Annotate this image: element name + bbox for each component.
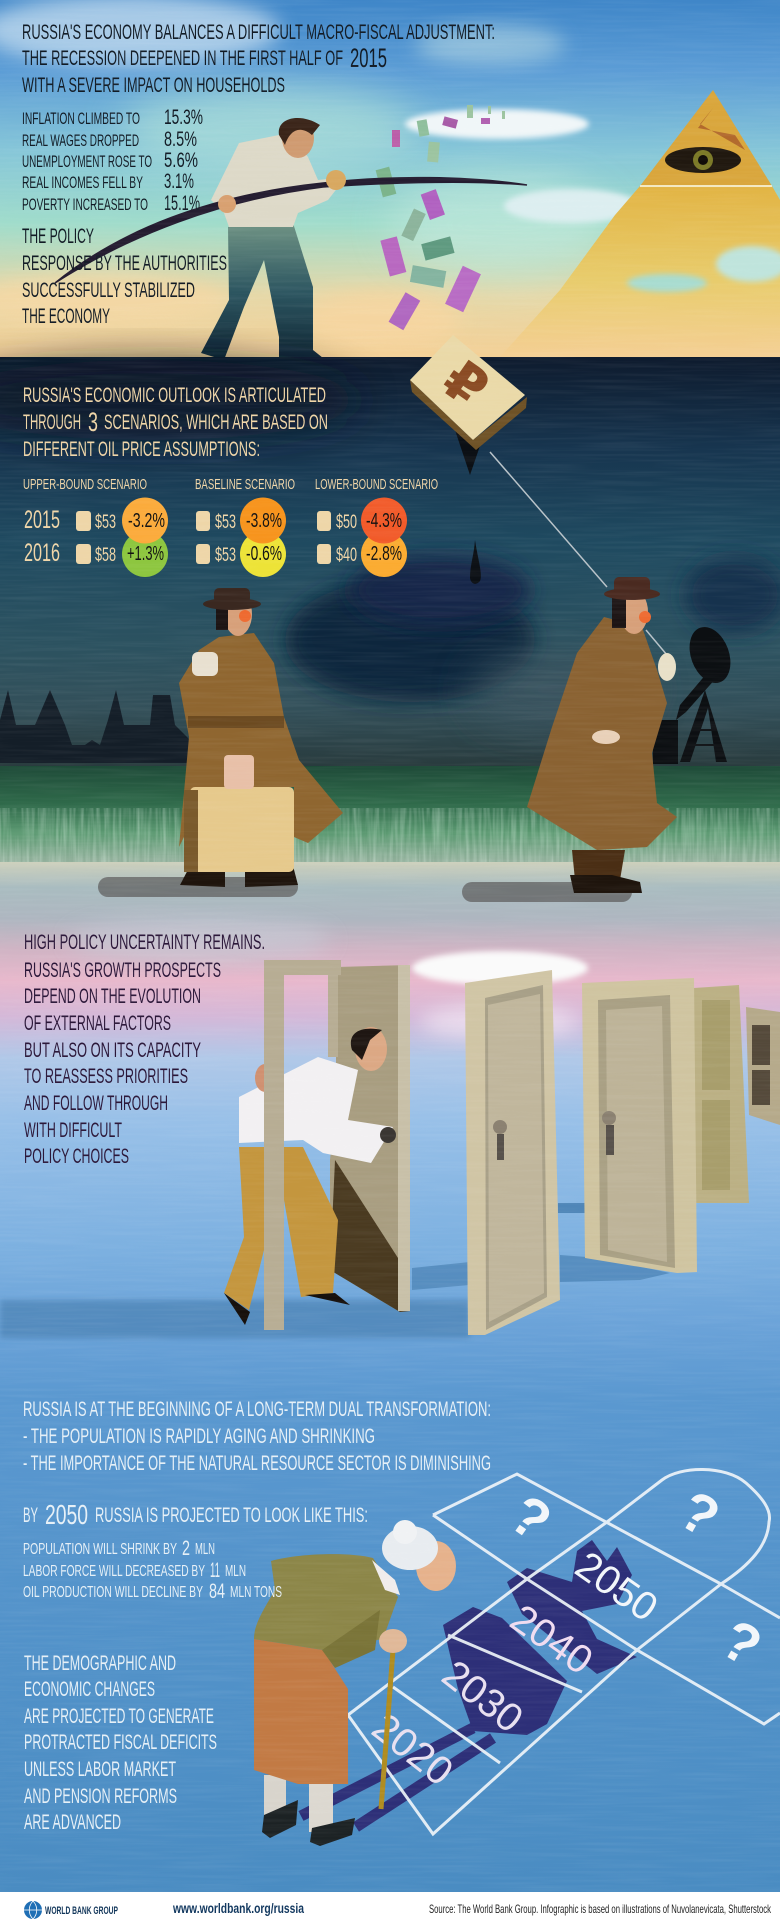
- 2016 growth circles: [122, 531, 407, 577]
- text: demographic and economic changes: PROTRACTED FISCAL DEFICITS: [24, 1731, 217, 1754]
- oil prices: $40: [336, 545, 357, 566]
- stats list: 5.6%: [164, 149, 198, 172]
- heading: scenarios: [23, 384, 328, 461]
- door frame: [264, 960, 341, 1330]
- text: high policy uncertainty: [24, 931, 265, 1168]
- text: projection to 2050: RUSSIA IS PROJECTED TO LOOK LIKE THIS:: [95, 1504, 368, 1527]
- open door: [330, 965, 410, 1312]
- growth values: -3.2%: [128, 510, 165, 532]
- heading: scenarios: DIFFERENT OIL PRICE ASSUMPTIONS:: [23, 438, 260, 461]
- year labels: 2016: [24, 539, 60, 567]
- text: high policy uncertainty: AND FOLLOW THROUGH: [24, 1092, 168, 1115]
- hopscotch labels: [364, 1478, 772, 1795]
- text: projection to 2050: POPULATION WILL SHRINK BY: [23, 1541, 177, 1558]
- scenario headings: [23, 476, 438, 493]
- figure: old woman with cane: [254, 1520, 456, 1846]
- heading: macro-fiscal adjustment: WITH A SEVERE IMPACT ON HOUSEHOLDS: [22, 74, 285, 97]
- text: demographic and economic changes: THE DEMOGRAPHIC AND: [24, 1652, 176, 1675]
- text: projection to 2050: 84: [209, 1580, 225, 1603]
- field: [0, 766, 780, 862]
- icon: ruble bag kite: [410, 335, 527, 475]
- text: policy response: [22, 225, 227, 328]
- text: high policy uncertainty: TO REASSESS PRIORITIES: [24, 1065, 188, 1088]
- panel: sky with fisherman and pyramid: [0, 0, 780, 362]
- text: projection to 2050: [23, 1499, 368, 1603]
- growth values: -0.6%: [246, 543, 282, 565]
- dark storm clouds: [0, 360, 780, 730]
- website link: www.worldbank.org/russia: [172, 1900, 304, 1916]
- door with keyhole, centre: [465, 970, 560, 1335]
- city skyline: [0, 690, 190, 763]
- shoe shadows: [98, 877, 632, 902]
- oil prices: [95, 512, 357, 566]
- stats list: 3.1%: [164, 170, 194, 193]
- text: projection to 2050: MLN: [195, 1541, 215, 1558]
- scenario headings: UPPER-BOUND SCENARIO: [23, 476, 147, 493]
- oil prices: $53: [215, 545, 236, 566]
- text: projection to 2050: LABOR FORCE WILL DECREASED BY: [23, 1563, 205, 1580]
- text: projection to 2050: MLN TONS: [230, 1584, 282, 1601]
- oil prices: $58: [95, 545, 116, 566]
- floor shadows: [0, 1203, 670, 1338]
- panel: night scene: [0, 335, 780, 902]
- heading: macro-fiscal adjustment: THE RECESSION DEEPENED IN THE FIRST HALF OF: [22, 47, 343, 70]
- text: high policy uncertainty: POLICY CHOICES: [24, 1145, 129, 1168]
- panel: doors scene: [0, 918, 780, 1846]
- growth values: +1.3%: [127, 543, 164, 565]
- heading: macro-fiscal adjustment: 2015: [350, 43, 387, 73]
- heading: scenarios: SCENARIOS, WHICH ARE BASED ON: [104, 411, 328, 434]
- text: policy response: RESPONSE BY THE AUTHORITIES: [22, 252, 227, 275]
- back doors: [694, 985, 780, 1203]
- hopscotch labels: ?: [499, 1482, 563, 1553]
- footer: [0, 1892, 780, 1925]
- stats list: POVERTY INCREASED TO: [22, 195, 148, 214]
- 2015 growth circles: [122, 498, 407, 544]
- growth values: [127, 510, 402, 565]
- text: projection to 2050: 2050: [45, 1499, 88, 1530]
- logo: World Bank Group: [24, 1901, 118, 1919]
- hopscotch shadow: [301, 1540, 637, 1827]
- text: projection to 2050: BY: [23, 1504, 38, 1527]
- text: demographic and economic changes: ARE ADVANCED: [24, 1811, 121, 1834]
- stats list: 15.3%: [164, 106, 203, 129]
- text: demographic and economic changes: UNLESS LABOR MARKET: [24, 1758, 176, 1781]
- text: high policy uncertainty: RUSSIA'S GROWTH PROSPECTS: [24, 959, 221, 982]
- chart: scenario table: [23, 476, 438, 577]
- sky background: [0, 0, 780, 360]
- growth values: -4.3%: [366, 510, 402, 532]
- stats list: [22, 106, 203, 215]
- text: high policy uncertainty: OF EXTERNAL FACTORS: [24, 1012, 171, 1035]
- stats list: 15.1%: [164, 192, 200, 215]
- scenario headings: LOWER-BOUND SCENARIO: [315, 476, 438, 493]
- scenario headings: BASELINE SCENARIO: [195, 476, 295, 493]
- clouds: [70, 918, 588, 1040]
- oil prices: $50: [336, 512, 357, 533]
- icon: ruble bag kite: ₽: [431, 347, 500, 422]
- logo: World Bank Group: WORLD BANK GROUP: [45, 1905, 118, 1917]
- icon: oil drop: [470, 540, 481, 584]
- oil pump jack: [653, 621, 738, 764]
- growth values: -3.8%: [246, 510, 282, 532]
- stats list: INFLATION CLIMBED TO: [22, 109, 140, 128]
- night sky: [0, 357, 780, 769]
- heading: scenarios: RUSSIA'S ECONOMIC OUTLOOK IS ARTICULATED: [23, 384, 326, 407]
- text: dual transformation: RUSSIA IS AT THE BEGINNING OF A LONG-TERM DUAL TRANSFORMATION:: [23, 1398, 491, 1421]
- icon: falling bank notes: [376, 105, 505, 330]
- floor and pink sky background: [0, 862, 780, 1894]
- text: dual transformation: - THE POPULATION IS RAPIDLY AGING AND SHRINKING: [23, 1425, 375, 1448]
- text: high policy uncertainty: BUT ALSO ON ITS CAPACITY: [24, 1039, 201, 1062]
- hopscotch labels: 2040: [502, 1596, 600, 1683]
- text: policy response: THE POLICY: [22, 225, 94, 248]
- text: demographic and economic changes: ARE PROJECTED TO GENERATE: [24, 1705, 214, 1728]
- figure: man holding the string: [527, 577, 677, 893]
- heading: scenarios: 3: [88, 407, 98, 437]
- text: high policy uncertainty: HIGH POLICY UNCERTAINTY REMAINS.: [24, 931, 265, 954]
- text: projection to 2050: MLN: [225, 1563, 246, 1580]
- figure: man with suitcase: [179, 588, 343, 887]
- stats list: UNEMPLOYMENT ROSE TO: [22, 152, 152, 171]
- heading: macro-fiscal adjustment: RUSSIA'S ECONOMY BALANCES A DIFFICULT MACRO-FISCAL ADJUSTMENT:: [22, 21, 495, 44]
- text: demographic and economic changes: AND PENSION REFORMS: [24, 1785, 177, 1808]
- stats list: 8.5%: [164, 128, 197, 151]
- text: demographic and economic changes: ECONOMIC CHANGES: [24, 1678, 155, 1701]
- oil prices: $53: [215, 512, 236, 533]
- footer background: [0, 1892, 780, 1925]
- text: high policy uncertainty: DEPEND ON THE EVOLUTION: [24, 985, 201, 1008]
- figure: man with fishing rod: [55, 118, 527, 362]
- hopscotch labels: ?: [669, 1478, 730, 1550]
- grass: [0, 808, 780, 862]
- stats list: REAL INCOMES FELL BY: [22, 173, 143, 192]
- oil prices: $53: [95, 512, 116, 533]
- growth values: -2.8%: [366, 543, 402, 565]
- clouds: [0, 0, 640, 348]
- stats list: REAL WAGES DROPPED: [22, 131, 139, 150]
- text: dual transformation: [23, 1398, 491, 1475]
- text: projection to 2050: 2: [182, 1537, 190, 1560]
- figure: man peeking through door: [224, 1027, 396, 1325]
- text: high policy uncertainty: WITH DIFFICULT: [24, 1119, 122, 1142]
- hopscotch labels: 2020: [364, 1705, 461, 1795]
- text: projection to 2050: 11: [210, 1559, 220, 1582]
- text: projection to 2050: OIL PRODUCTION WILL DECLINE BY: [23, 1584, 203, 1601]
- icon: pyramid with eye: [500, 90, 780, 357]
- text: dual transformation: - THE IMPORTANCE OF THE NATURAL RESOURCE SECTOR IS DIMINISHING: [23, 1452, 491, 1475]
- text: policy response: SUCCESSFULLY STABILIZED: [22, 279, 195, 302]
- heading: macro-fiscal adjustment: [22, 21, 495, 97]
- hopscotch labels: 2030: [434, 1652, 531, 1742]
- door with keyhole, right: [582, 978, 697, 1273]
- hopscotch chalk grid: [348, 1469, 780, 1834]
- hopscotch labels: 2050: [567, 1543, 665, 1630]
- year labels: [24, 506, 60, 567]
- text: policy response: THE ECONOMY: [22, 305, 110, 328]
- heading: scenarios: THROUGH: [23, 411, 81, 434]
- hopscotch labels: ?: [711, 1607, 772, 1679]
- year labels: 2015: [24, 506, 60, 534]
- kite string: [490, 452, 667, 655]
- text: demographic and economic changes: [24, 1652, 217, 1834]
- icon: oil barrels: [76, 511, 331, 564]
